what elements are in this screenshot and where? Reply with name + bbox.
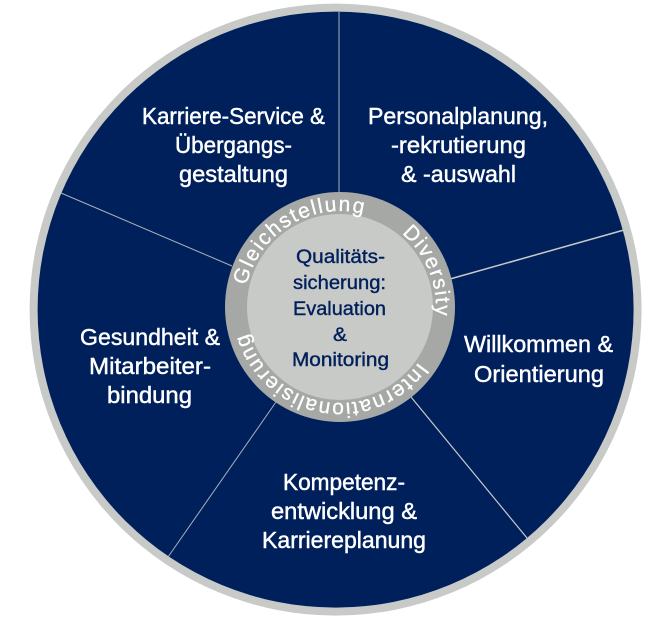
- segment: Gesundheit: Gesundheit &: [80, 324, 220, 350]
- segment: Personalplanung: & -auswahl: [401, 161, 516, 187]
- center text: Evaluation: [293, 298, 386, 320]
- center text: Monitoring: [292, 349, 389, 371]
- segment: Gesundheit: [80, 324, 220, 408]
- middle ring: [225, 192, 455, 422]
- center text: Qualitäts-: [296, 246, 385, 268]
- segment: Gesundheit: bindung: [107, 382, 192, 408]
- segment: Gesundheit: Mitarbeiter-: [89, 353, 211, 379]
- segment: Kompetenzentwicklung: [262, 469, 426, 553]
- segment: Willkommen: Orientierung: [474, 361, 604, 387]
- segment: Willkommen: Willkommen &: [464, 331, 613, 357]
- segment: Personalplanung: -rekrutierung: [391, 132, 526, 158]
- segment: Kompetenzentwicklung: entwicklung &: [271, 498, 417, 524]
- segment: Kompetenzentwicklung: Karriereplanung: [262, 527, 426, 553]
- ring label: Gleichstellung: Gleichstellung: [234, 198, 364, 283]
- segment: Karriere-Service: Karriere-Service &: [142, 103, 325, 129]
- center text: sicherung:: [293, 272, 386, 294]
- center disc: [247, 214, 433, 400]
- ring label: Internationalisierung: Internationalisierung: [237, 334, 430, 418]
- center text: [292, 246, 389, 371]
- segment: Kompetenzentwicklung: Kompetenz-: [283, 469, 405, 495]
- segment: Karriere-Service: Übergangs-: [175, 132, 292, 158]
- segment: Personalplanung: [368, 103, 548, 187]
- segment: Karriere-Service: gestaltung: [179, 161, 288, 187]
- ring label: Diversity: Diversity: [403, 224, 450, 316]
- segment: Karriere-Service: [142, 103, 325, 187]
- segment: Personalplanung: Personalplanung,: [368, 103, 548, 129]
- center text: &: [333, 324, 347, 346]
- segment: Willkommen: [464, 331, 613, 387]
